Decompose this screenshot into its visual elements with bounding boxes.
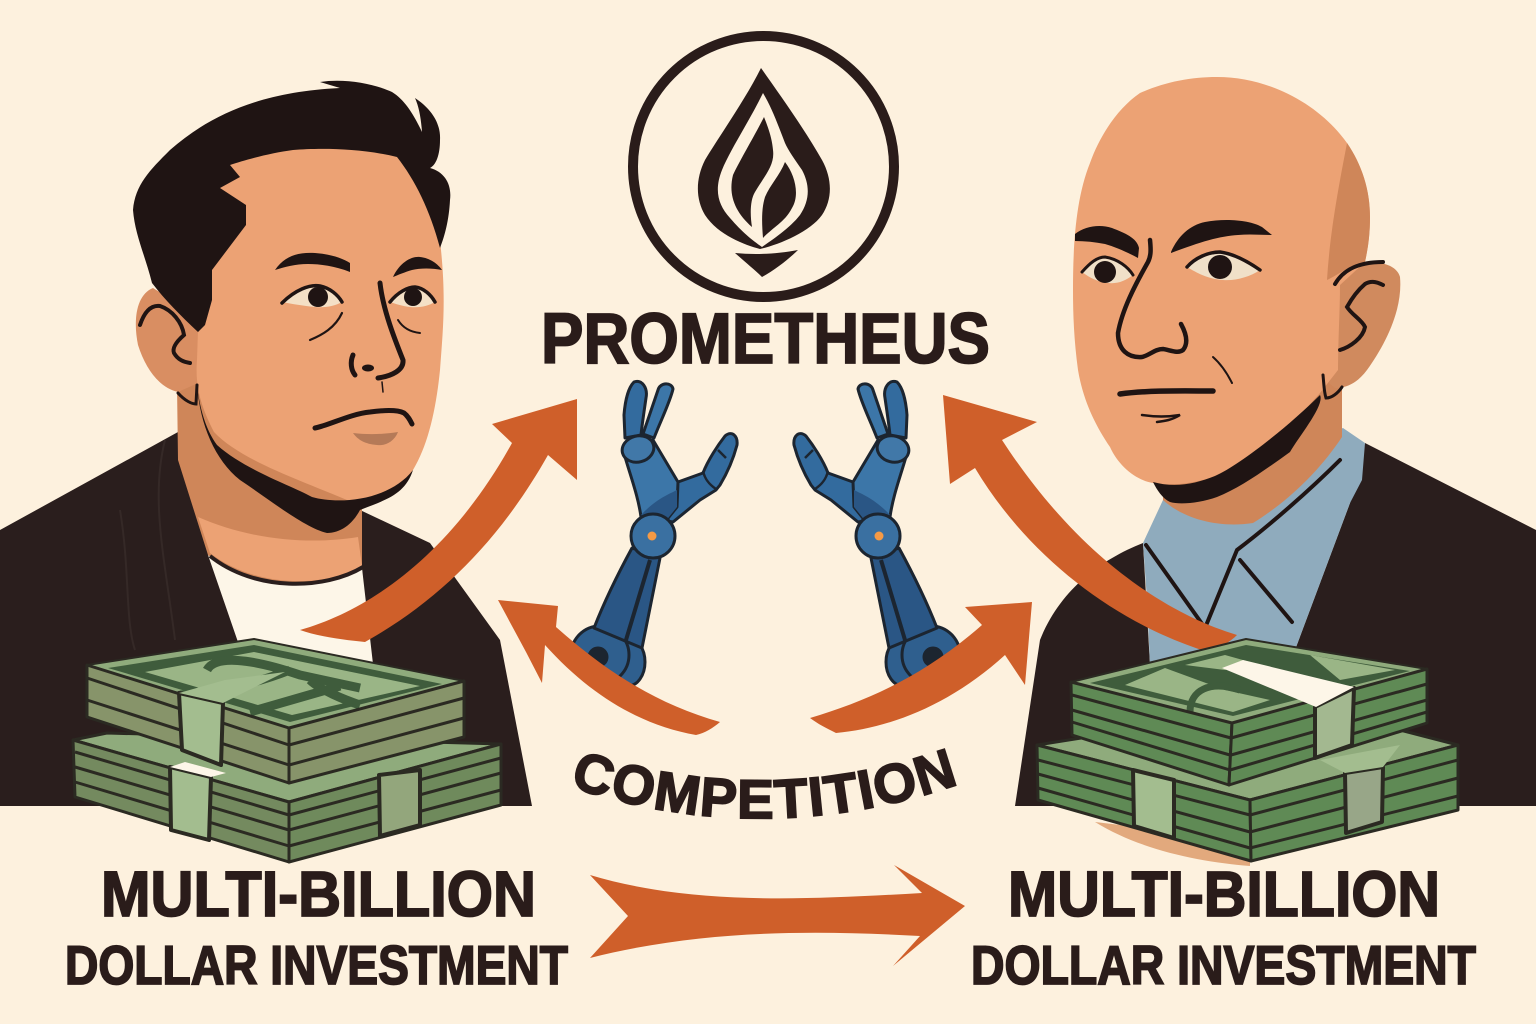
band [1345, 767, 1383, 833]
title: Prometheus: PROMETHEUS [541, 300, 990, 379]
label: right investment [971, 858, 1476, 996]
arrow: investment to investment [590, 865, 965, 966]
right line one: MULTI-BILLION [1008, 858, 1440, 930]
palm [853, 440, 908, 522]
left jacket lapels [120, 440, 175, 650]
flame left tongue [731, 117, 773, 227]
money stack left [73, 639, 501, 862]
left face lines [140, 283, 435, 428]
left lip [353, 432, 398, 445]
logo: Prometheus flame [633, 36, 894, 297]
left shirt collar [210, 556, 363, 584]
left person [0, 81, 532, 806]
left neck [177, 375, 362, 584]
finger [885, 381, 907, 438]
finger [643, 384, 673, 438]
shadow [1095, 822, 1250, 866]
label: competition: COMPETITION [574, 748, 957, 820]
band top [1222, 660, 1354, 707]
forearm [594, 548, 660, 648]
arrow: right stack to Prometheus [943, 395, 1237, 652]
finger [624, 381, 646, 438]
lower stack [1037, 730, 1458, 861]
wrist joint [631, 514, 675, 558]
finger [858, 384, 888, 438]
money stack right [1037, 639, 1458, 866]
arrow: competition to left [498, 600, 720, 735]
knuckle [874, 432, 912, 466]
left eyebrows [275, 253, 442, 277]
lower stack [73, 733, 501, 862]
base joints [611, 638, 645, 686]
right neck [1163, 375, 1342, 524]
band [170, 767, 211, 840]
right head [1073, 77, 1370, 484]
robot arm right [794, 381, 960, 686]
band side [1315, 688, 1354, 758]
flame inner ring [718, 93, 808, 247]
band [1133, 770, 1174, 838]
logo ring [633, 36, 894, 297]
arrow: competition to right [810, 602, 1032, 733]
right eyebrows [1075, 220, 1272, 258]
band [379, 770, 420, 836]
palm [623, 440, 678, 522]
left line one: MULTI-BILLION [101, 858, 536, 930]
left shirt [208, 555, 373, 664]
band [179, 693, 223, 765]
right eyes [1082, 253, 1260, 283]
left face [197, 135, 444, 500]
left eyes [282, 286, 435, 307]
left ear [136, 288, 205, 392]
base joints [886, 638, 920, 686]
left jacket [0, 432, 532, 806]
arrows [300, 395, 1237, 966]
forearm [871, 548, 937, 648]
right jaw shadow [1153, 395, 1321, 503]
left nostril [362, 364, 374, 372]
right person [1015, 77, 1536, 806]
thumb [794, 434, 871, 522]
left hair [133, 81, 450, 332]
thumb [660, 434, 737, 522]
left chest light [198, 517, 362, 581]
right face lines [1082, 240, 1383, 628]
robot arm left [571, 381, 737, 686]
flame right tongue [762, 162, 796, 238]
knuckle [619, 432, 657, 466]
left jaw shadow [197, 385, 413, 533]
wrist joint [856, 514, 900, 558]
upper stack [87, 639, 464, 783]
flame drop [698, 68, 830, 249]
upper stack [1071, 639, 1427, 785]
flame base [735, 250, 798, 277]
arrow: left stack to Prometheus [300, 399, 577, 642]
right jacket [1015, 443, 1536, 806]
right shirt [1143, 428, 1365, 665]
label: left investment [65, 858, 568, 996]
left line two: DOLLAR INVESTMENT [65, 934, 568, 996]
right head shade [1327, 143, 1370, 280]
right ear [1325, 262, 1400, 388]
